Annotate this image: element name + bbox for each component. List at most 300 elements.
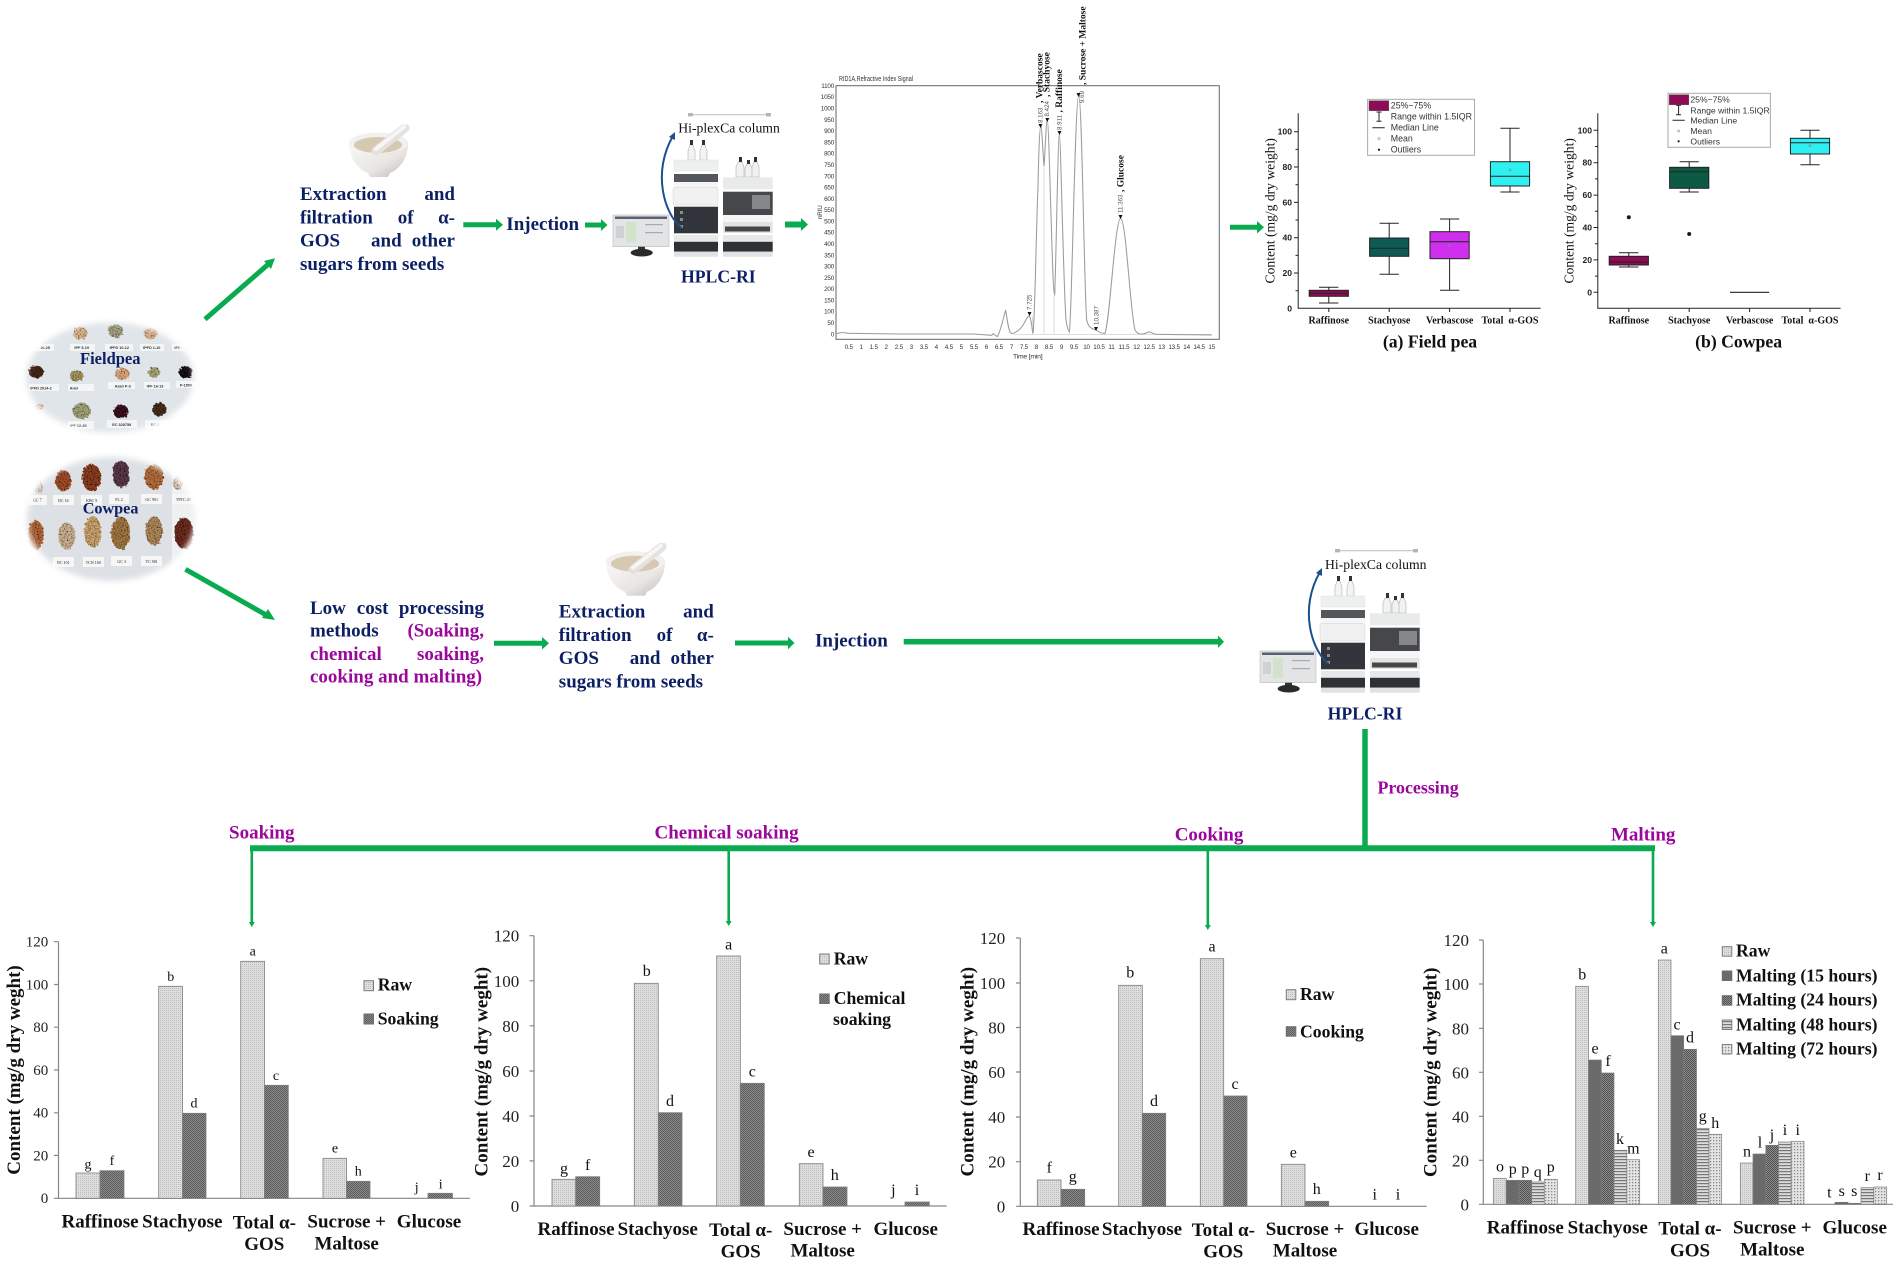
y tick labels: 40 — [988, 1108, 1005, 1127]
chromatogram y axis labels: 50 — [827, 320, 835, 327]
chromatogram x axis labels: 3.5 — [920, 344, 929, 351]
y tick labels: 40 — [1452, 1107, 1469, 1126]
legend — [1668, 93, 1770, 147]
legend: soaking — [833, 1009, 891, 1029]
variety labels: field pea: Azad P-3 — [115, 384, 131, 388]
text: low cost processing methods: (Soaking, — [407, 621, 484, 642]
legend: Raw — [1736, 941, 1771, 961]
y tick labels: 60 — [33, 1063, 48, 1079]
y tick labels: 0 — [511, 1197, 519, 1216]
category labels: Total α- — [233, 1212, 296, 1233]
variety labels: cowpea: GC 7 — [33, 498, 42, 502]
chromatogram signal trace — [837, 95, 1212, 337]
significance letters: e — [807, 1144, 815, 1161]
legend: Mean — [1391, 133, 1413, 143]
y tick labels: 0 — [1460, 1195, 1469, 1214]
significance letters: e — [1290, 1144, 1297, 1161]
category labels — [1309, 315, 1539, 326]
variety labels: field pea: IPFD 2014-2 — [30, 386, 52, 390]
chromatogram axis titles: Time [min] — [1013, 353, 1043, 360]
chromatogram x axis labels: 6 — [985, 344, 989, 351]
chart: soaking bars — [4, 935, 470, 1255]
text: low cost processing methods: Low — [310, 598, 346, 619]
y tick labels: 80 — [502, 1017, 519, 1036]
category labels: Total α- — [1658, 1218, 1722, 1239]
legend: Mean — [1690, 126, 1712, 136]
significance letters: a — [250, 945, 257, 960]
box: Raffinose — [1309, 287, 1348, 303]
variety labels: cowpea: GC 901 — [145, 497, 158, 502]
arrow: extraction to injection (lower) — [735, 637, 794, 649]
bars: glucose group — [1835, 1187, 1887, 1204]
chromatogram y axis labels: 350 — [824, 252, 835, 259]
significance letters — [1496, 940, 1883, 1202]
y tick labels: 100 — [980, 974, 1005, 993]
category labels: Glucose — [1823, 1217, 1887, 1238]
label: Cooking: Cooking — [1175, 825, 1244, 846]
legend: Malting (15 hours) — [1736, 965, 1878, 985]
text: extraction and filtration (lower): GOS — [559, 648, 599, 669]
chromatogram x axis labels: 5.5 — [970, 344, 979, 351]
chromatogram axis titles: nRIU — [817, 205, 824, 219]
box: Total alpha-GOS — [1790, 130, 1830, 165]
peak retention times: 8.163 — [1038, 107, 1044, 123]
arrow: to soaking chart — [249, 848, 255, 927]
significance letters: f — [585, 1157, 591, 1174]
arrow: fieldpea to extraction — [205, 258, 275, 319]
y tick labels: 40 — [33, 1106, 48, 1122]
y tick labels: 0 — [1287, 303, 1292, 313]
y tick labels: 60 — [1582, 190, 1592, 200]
category labels: GOS — [244, 1234, 284, 1255]
peak retention times: 11.363 — [1118, 194, 1124, 213]
chromatogram x axis labels: 7 — [1010, 344, 1014, 351]
axes — [1016, 938, 1427, 1206]
label: Malting: Malting — [1611, 825, 1676, 846]
y tick labels: 120 — [494, 927, 519, 946]
chromatogram x axis labels: 8 — [1035, 344, 1039, 351]
legend: Malting (72 hours) — [1736, 1039, 1878, 1059]
chromatogram x axis labels: 9.5 — [1070, 344, 1079, 351]
y tick labels: 20 — [33, 1148, 48, 1164]
category labels: Raffinose — [1309, 315, 1350, 326]
y tick labels: 100 — [1278, 127, 1292, 137]
peak names: , Raffinose — [1055, 69, 1065, 112]
y tick labels: 80 — [988, 1018, 1005, 1038]
category labels: Total α- — [1192, 1220, 1255, 1241]
chromatogram x axis labels: 13 — [1158, 344, 1166, 351]
bars — [552, 956, 929, 1206]
legend — [820, 949, 906, 1029]
category labels: Glucose — [1355, 1219, 1419, 1240]
text: extraction and filtration (lower): α- — [697, 625, 714, 646]
text: extraction and filtration (top): other — [412, 231, 456, 252]
label: Hi-plexCa column (top): Hi-plexCa column — [678, 121, 780, 136]
text: extraction and filtration (lower): of — [657, 625, 673, 646]
chromatogram x axis labels: 12 — [1133, 344, 1141, 351]
text: low cost processing methods — [310, 598, 484, 688]
variety labels: cowpea: BC 101 — [57, 560, 69, 565]
variety labels: cowpea: TPTC 29 — [176, 497, 191, 502]
category labels: Stachyose — [1668, 315, 1711, 326]
bars — [76, 961, 452, 1198]
chromatogram y axis labels: 550 — [824, 207, 835, 214]
peak names — [1036, 6, 1126, 192]
chromatogram title: RID1A,Refractive Index Signal — [839, 76, 913, 83]
category labels: Total α-GOS — [1482, 315, 1539, 326]
box: Stachyose — [1370, 223, 1409, 274]
significance letters: a — [1661, 940, 1668, 957]
y tick labels: 20 — [988, 1153, 1005, 1172]
label: Processing: Processing — [1378, 777, 1459, 797]
peak retention times — [1026, 90, 1124, 325]
category labels: Total α-GOS — [1782, 315, 1839, 326]
icon: HPLC instrument (lower) — [1260, 549, 1420, 693]
significance letters: s — [1851, 1183, 1857, 1200]
legend: Malting (24 hours) — [1736, 990, 1878, 1010]
significance letters: k — [1616, 1131, 1624, 1148]
category labels: Verbascose — [1426, 315, 1474, 326]
chromatogram x axis labels: 15 — [1208, 344, 1216, 351]
chromatogram y axis labels: 300 — [824, 264, 835, 271]
significance letters: b — [167, 970, 174, 985]
y tick labels: 40 — [502, 1107, 519, 1126]
category labels: Raffinose — [537, 1219, 615, 1240]
variety labels: field pea: IPFD 1-10 — [143, 346, 160, 350]
axes — [1294, 113, 1541, 312]
arrow: to chemical soaking chart — [726, 848, 732, 926]
chromatogram x axis labels — [845, 344, 1216, 351]
y tick labels: 80 — [1282, 162, 1292, 172]
y tick labels: 100 — [1444, 975, 1469, 994]
text: low cost processing methods: processing — [399, 598, 484, 619]
chromatogram x axis labels: 12.5 — [1143, 344, 1156, 351]
box: Verbascose — [1430, 219, 1469, 290]
chromatogram x axis labels: 1 — [860, 344, 864, 351]
y tick labels: 100 — [26, 978, 48, 994]
significance letters: d — [1150, 1093, 1158, 1110]
label: Fieldpea: Fieldpea — [80, 349, 140, 368]
legend: Raw — [1300, 984, 1335, 1004]
caption: (b) Cowpea — [1695, 332, 1782, 352]
text: extraction and filtration (top): sugars from seeds — [300, 254, 444, 275]
text: extraction and filtration (lower): sugars from seeds — [559, 672, 703, 692]
label: HPLC-RI (lower): HPLC-RI — [1328, 703, 1402, 723]
label: Chemical soaking: Chemical soaking — [654, 822, 799, 843]
variety labels: cowpea: GC 3 — [117, 559, 126, 564]
category labels: Stachyose — [142, 1211, 222, 1232]
chart: box plot (b) Cowpea — [1562, 93, 1841, 352]
variety labels: cowpea: TC 901 — [146, 559, 158, 564]
icon: mortar and pestle (lower) — [606, 546, 665, 596]
chart: chemical soaking bars — [471, 927, 947, 1263]
chromatogram y axis labels: 650 — [824, 184, 835, 192]
significance letters: f — [1047, 1160, 1053, 1177]
legend: Range within 1.5IQR — [1391, 111, 1472, 121]
significance letters: r — [1877, 1167, 1883, 1184]
significance letters: q — [1534, 1164, 1542, 1181]
bars: total alpha-GOS group — [1658, 960, 1722, 1204]
icon: mortar and pestle (top) — [349, 127, 408, 177]
arrow: chromatogram to box plots — [1230, 221, 1264, 234]
variety labels: field pea: EC 3 — [151, 423, 159, 427]
axes — [54, 942, 470, 1198]
significance letters: p — [1547, 1159, 1555, 1176]
chromatogram x axis labels: 11.5 — [1118, 344, 1130, 351]
significance letters: b — [1578, 966, 1586, 983]
y tick labels: 0 — [997, 1197, 1005, 1216]
icon: HPLC instrument (top) — [613, 113, 773, 257]
significance letters: a — [725, 936, 732, 953]
category labels: Sucrose + — [1266, 1219, 1344, 1240]
significance letters: c — [1673, 1016, 1681, 1033]
peak retention times: 10.387 — [1094, 306, 1100, 325]
chart: cooking bars — [957, 929, 1427, 1263]
significance letters: p — [1521, 1161, 1529, 1178]
label: Cowpea: Cowpea — [83, 499, 138, 517]
label: Soaking: Soaking — [229, 822, 295, 843]
category labels: GOS — [1203, 1242, 1243, 1263]
y tick labels: 100 — [1578, 125, 1592, 135]
text: low cost processing methods: chemical — [310, 644, 382, 665]
text: extraction and filtration (top): filtration — [300, 207, 373, 228]
peak markers — [1028, 93, 1122, 331]
legend: Outliers — [1391, 144, 1422, 154]
y tick labels: 40 — [1582, 222, 1592, 232]
chromatogram y axis labels: 450 — [824, 230, 835, 237]
legend: 25%~75% — [1391, 100, 1431, 110]
peak retention times: 9.69 — [1079, 90, 1086, 103]
chromatogram x axis labels: 1.5 — [870, 344, 878, 351]
chromatogram x axis labels: 5 — [960, 344, 964, 351]
y axis title: Content (mg/g dry weight) — [1262, 138, 1278, 283]
category labels: Sucrose + — [783, 1219, 862, 1240]
y tick labels: 120 — [26, 935, 48, 951]
y tick labels: 20 — [502, 1152, 519, 1171]
variety labels: field pea — [29, 344, 196, 429]
chromatogram y axis labels: 1100 — [821, 83, 835, 90]
y tick labels: 40 — [1282, 233, 1292, 243]
chromatogram x axis labels: 11 — [1108, 344, 1115, 351]
axes — [1479, 940, 1893, 1204]
y tick labels — [980, 929, 1005, 1216]
label: Hi-plexCa column (lower): Hi-plexCa column — [1325, 557, 1427, 572]
y tick labels — [1578, 125, 1592, 297]
chromatogram x axis labels: 2 — [885, 344, 889, 351]
legend: Median Line — [1690, 116, 1737, 126]
y axis title: Content (mg/g dry weght) — [471, 967, 492, 1176]
text: low cost processing methods: cost — [357, 598, 389, 619]
significance letters: h — [1711, 1115, 1719, 1132]
legend: Cooking — [1300, 1021, 1364, 1041]
y axis title: Content (mg/g dry weght) — [4, 965, 25, 1175]
chromatogram y axis labels: 250 — [824, 275, 835, 282]
y tick labels: 20 — [1582, 255, 1592, 265]
significance letters — [84, 945, 443, 1196]
text: extraction and filtration (top): GOS — [300, 231, 340, 252]
category labels — [61, 1211, 461, 1255]
chromatogram x axis labels: 13.5 — [1168, 344, 1181, 351]
text: injection (lower): Injection — [815, 631, 888, 652]
text: low cost processing methods: cooking and malting) — [310, 667, 482, 688]
y tick labels: 0 — [41, 1191, 48, 1207]
category labels: Glucose — [397, 1211, 461, 1232]
significance letters: d — [666, 1093, 674, 1110]
chromatogram y axis labels: 700 — [824, 173, 835, 180]
y tick labels: 0 — [1587, 287, 1592, 297]
text: extraction and filtration (top): Extraction — [300, 184, 387, 205]
category labels: Raffinose — [1487, 1217, 1564, 1238]
category labels: Glucose — [874, 1219, 938, 1240]
variety labels: field pea: 10-25 — [40, 346, 50, 350]
text: low cost processing methods: methods — [310, 621, 379, 642]
chart: chromatogram — [817, 6, 1219, 360]
chromatogram y axis labels: 800 — [824, 151, 835, 158]
significance letters: e — [332, 1141, 338, 1156]
chromatogram y axis labels: 900 — [824, 128, 835, 135]
peak retention times: 8.424 — [1044, 100, 1051, 116]
legend: Malting (48 hours) — [1736, 1014, 1878, 1034]
significance letters: b — [1126, 965, 1134, 982]
significance letters: i — [1396, 1186, 1401, 1203]
y tick labels: 80 — [1582, 158, 1592, 168]
variety labels: cowpea: DC 16 — [58, 498, 69, 503]
significance letters: o — [1496, 1159, 1504, 1176]
bars — [1037, 959, 1329, 1206]
peak names: , Glucose — [1116, 155, 1126, 192]
significance letters: i — [439, 1177, 443, 1192]
significance letters: c — [273, 1069, 279, 1084]
chart: malting bars — [1421, 931, 1893, 1262]
significance letters: c — [1231, 1076, 1239, 1093]
significance letters: a — [1208, 939, 1216, 956]
chromatogram x axis labels: 7.5 — [1020, 344, 1029, 351]
chromatogram y axis labels: 150 — [824, 297, 835, 304]
y tick labels: 120 — [1444, 931, 1469, 950]
text: extraction and filtration (lower): and — [630, 648, 661, 669]
chromatogram x axis labels: 4 — [935, 344, 939, 351]
significance letters: g — [1699, 1108, 1707, 1125]
seed image: Fieldpea — [24, 321, 196, 434]
y axis title: Content (mg/g dry weght) — [957, 967, 978, 1176]
text: extraction and filtration (lower): other — [671, 648, 714, 669]
y axis title: Content (mg/g dry weight) — [1562, 138, 1578, 283]
axes — [1594, 113, 1841, 312]
chromatogram x axis labels: 4.5 — [945, 344, 954, 351]
significance letters: r — [1865, 1168, 1871, 1185]
significance letters: e — [1591, 1040, 1599, 1057]
peak retention times: 7.725 — [1026, 294, 1034, 310]
significance letters: b — [643, 963, 651, 980]
text: extraction and filtration (lower) — [559, 602, 714, 692]
significance letters: h — [1313, 1181, 1321, 1198]
chromatogram x axis labels: 3 — [910, 344, 914, 351]
legend: Chemical — [834, 988, 906, 1008]
variety labels: field pea: P-1500 — [180, 384, 192, 388]
category labels: Raffinose — [1022, 1219, 1100, 1240]
y tick labels — [1278, 127, 1292, 313]
text: extraction and filtration (lower): Extraction — [559, 602, 646, 622]
significance letters: t — [1827, 1185, 1832, 1202]
chromatogram x axis labels: 6.5 — [995, 344, 1004, 351]
peak names: , Verbascose — [1036, 53, 1046, 103]
significance letters: c — [749, 1064, 756, 1081]
y tick labels: 100 — [494, 972, 519, 991]
significance letters — [560, 936, 920, 1199]
text: extraction and filtration (lower): and — [683, 602, 714, 622]
arrow: to malting chart — [1650, 848, 1656, 927]
peak names: , Stachyose — [1043, 52, 1053, 97]
connector: processing tree — [249, 729, 1656, 930]
legend — [1286, 984, 1364, 1041]
peak names: , Sucrose + Maltose — [1078, 6, 1088, 85]
significance letters: d — [190, 1097, 198, 1112]
legend — [364, 975, 439, 1028]
significance letters: f — [1605, 1053, 1611, 1070]
label: HPLC-RI (top): HPLC-RI — [681, 267, 756, 287]
category labels: Maltose — [315, 1233, 379, 1254]
variety labels: cowpea: TCN 160 — [86, 560, 101, 565]
y tick labels: 60 — [1452, 1063, 1469, 1082]
variety labels: field pea: IPF 12-20 — [70, 424, 87, 428]
y tick labels — [494, 927, 519, 1216]
text: extraction and filtration (top): of — [398, 207, 414, 228]
chromatogram y axis labels: 950 — [824, 117, 835, 124]
arrow: to cooking chart — [1205, 848, 1211, 930]
y tick labels: 20 — [1282, 268, 1292, 278]
chromatogram x axis labels: 14 — [1183, 344, 1191, 351]
chromatogram x axis labels: 10.5 — [1093, 344, 1105, 351]
category labels: Stachyose — [1368, 315, 1411, 326]
category labels: Stachyose — [1102, 1219, 1182, 1240]
chromatogram y axis labels: 600 — [824, 196, 835, 203]
y tick labels: 20 — [1452, 1151, 1469, 1170]
variety labels: cowpea — [28, 494, 194, 567]
chromatogram x axis labels: 9 — [1060, 344, 1064, 351]
variety labels: field pea: IPFD 10-12 — [110, 346, 129, 350]
legend: Soaking — [378, 1008, 439, 1028]
chromatogram y axis labels: 100 — [824, 309, 835, 316]
peak retention times: 8.911 — [1056, 114, 1064, 130]
category labels: Stachyose — [618, 1219, 698, 1240]
legend: Raw — [834, 949, 868, 969]
variety labels: field pea: IPF- — [174, 346, 182, 350]
significance letters: n — [1743, 1143, 1751, 1160]
bars: stachyose group — [1576, 986, 1640, 1204]
y tick labels: 60 — [502, 1062, 519, 1081]
y tick labels: 60 — [1282, 197, 1292, 207]
significance letters: g — [84, 1157, 92, 1172]
axes — [530, 936, 947, 1206]
legend — [1368, 99, 1474, 155]
variety labels: field pea: IPF 16-13 — [147, 384, 163, 388]
category labels — [537, 1219, 938, 1263]
chromatogram x axis labels: 14.5 — [1193, 344, 1206, 351]
category labels — [1609, 315, 1839, 326]
category labels — [1022, 1219, 1419, 1263]
category labels: Sucrose + — [307, 1211, 386, 1232]
category labels: GOS — [1670, 1241, 1710, 1262]
significance letters: h — [355, 1165, 362, 1180]
variety labels: cowpea: KBC 9 — [86, 498, 97, 503]
category labels: Maltose — [791, 1241, 855, 1262]
text: injection (top): Injection — [506, 214, 580, 235]
significance letters: i — [1372, 1186, 1377, 1203]
legend: Range within 1.5IQR — [1690, 105, 1770, 115]
chromatogram x axis labels: 2.5 — [895, 344, 904, 351]
significance letters: j — [1769, 1127, 1774, 1144]
text: extraction and filtration (top) — [300, 184, 456, 275]
